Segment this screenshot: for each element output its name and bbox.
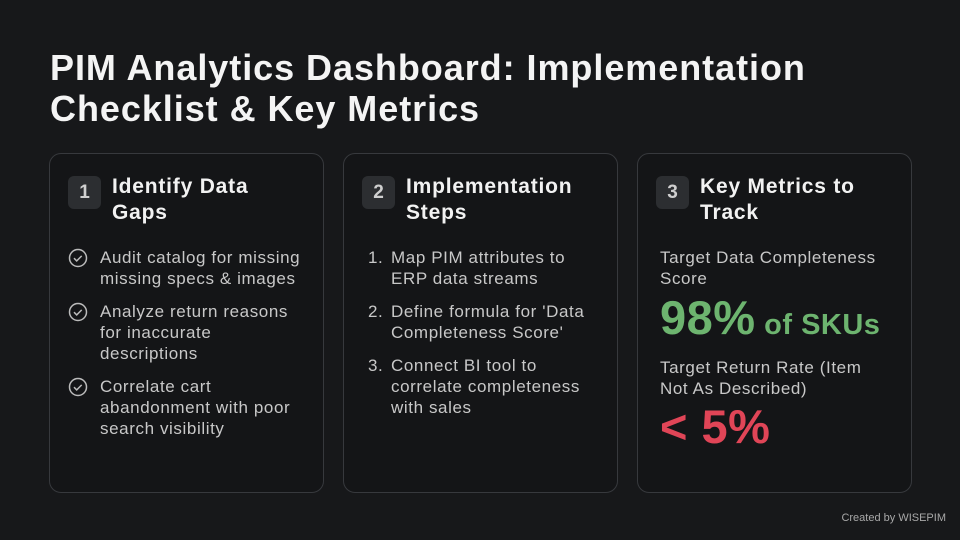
steps list: [368, 248, 584, 417]
metrics: Target Return Rate (Item: [660, 358, 861, 377]
metrics: Score: [660, 269, 707, 288]
panel: implementation steps: [343, 153, 618, 493]
steps list: Completeness Score': [391, 323, 563, 342]
heading: Identify Data: [112, 175, 248, 198]
steps list: 1.: [368, 248, 383, 267]
steps list: 2.: [368, 302, 383, 321]
heading: Steps: [406, 201, 467, 224]
metrics: Target Data Completeness: [660, 248, 876, 267]
checklist: abandonment with poor: [100, 398, 290, 417]
checklist: Analyze return reasons: [100, 302, 288, 321]
heading: Key Metrics to: [700, 175, 855, 198]
panel: identify data gaps: [49, 153, 324, 493]
steps list: 3.: [368, 356, 383, 375]
steps list: with sales: [391, 398, 472, 417]
badge 2: 2: [373, 182, 384, 203]
title: Checklist & Key Metrics: [50, 88, 480, 129]
steps list: Connect BI tool to: [391, 356, 537, 375]
badge 1: [68, 176, 101, 209]
badge 3: 3: [667, 182, 678, 203]
metrics: [660, 248, 880, 453]
metrics: 98% of SKUs: [660, 291, 880, 344]
checklist: descriptions: [100, 344, 198, 363]
badge 2: [362, 176, 395, 209]
checklist: [68, 248, 300, 438]
panel: key metrics: [637, 153, 912, 493]
title: [50, 47, 806, 129]
heading: Implementation: [406, 175, 572, 198]
steps list: correlate completeness: [391, 377, 580, 396]
badge 1: 1: [79, 182, 90, 203]
steps list: Map PIM attributes to: [391, 248, 565, 267]
checklist: missing specs & images: [100, 269, 296, 288]
heading: Track: [700, 201, 759, 224]
checklist: for inaccurate: [100, 323, 211, 342]
heading: [700, 175, 855, 224]
steps list: Define formula for 'Data: [391, 302, 584, 321]
heading: [112, 175, 248, 224]
heading: Gaps: [112, 201, 168, 224]
badge 3: [656, 176, 689, 209]
checklist: search visibility: [100, 419, 225, 438]
steps list: ERP data streams: [391, 269, 538, 288]
heading: [406, 175, 572, 224]
metrics: Not As Described): [660, 379, 807, 398]
checklist: Audit catalog for missing: [100, 248, 300, 267]
checklist: Correlate cart: [100, 377, 211, 396]
title: PIM Analytics Dashboard: Implementation: [50, 47, 806, 88]
metrics: < 5%: [660, 400, 770, 453]
footer credit: Created by WISEPIM: [841, 512, 946, 524]
